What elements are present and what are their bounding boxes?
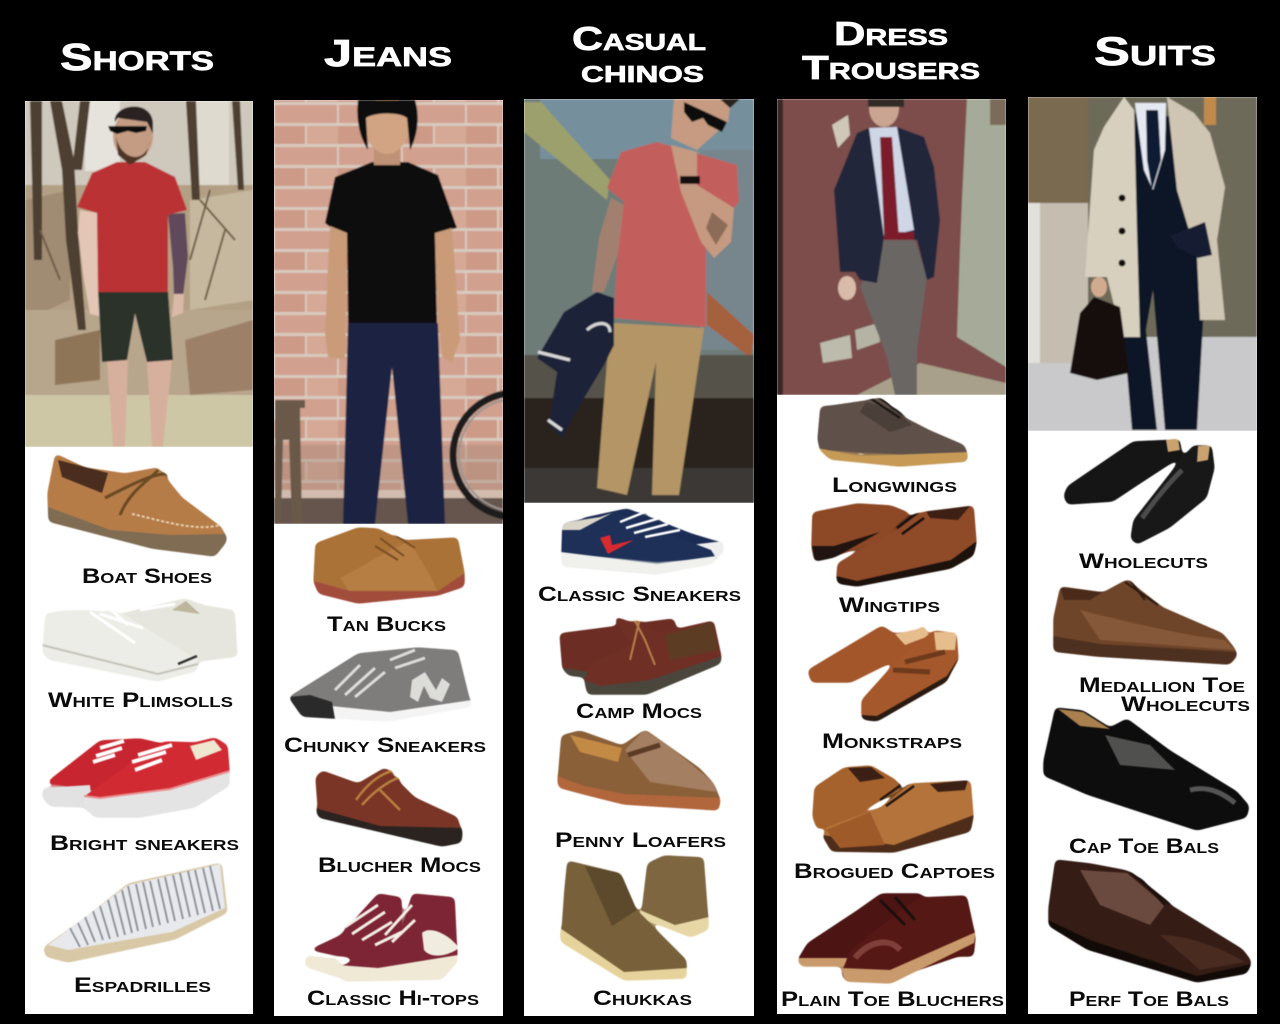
label: Brogued Captoes: Brogued Captoes [794,860,995,883]
label: Cap Toe Bals: Cap Toe Bals [1069,835,1219,858]
label: Medallion Toe Wholecuts: Medallion Toe [1079,674,1245,697]
heading: Dress Trousers: Dress [834,15,948,52]
label: Camp Mocs: Camp Mocs [576,700,702,723]
shoe: brogued captoes [812,765,974,853]
shoe: penny loafers [557,729,721,811]
label: Wholecuts: Wholecuts [1079,550,1208,573]
photo: man in navy blazer and grey trousers [777,89,1006,395]
photo: man in coral tee and chinos [524,99,754,503]
label: Blucher Mocs: Blucher Mocs [318,854,481,877]
photo: man in trench coat and navy suit [1028,97,1257,431]
label: Classic Sneakers: Classic Sneakers [538,583,741,606]
heading: Casual chinos [572,20,706,89]
shoe: tan bucks [313,527,465,604]
shoe: classic sneakers [561,508,724,575]
heading: Shorts: Shorts [60,37,214,79]
heading: Casual chinos: Casual [572,20,706,57]
label: White Plimsolls: White Plimsolls [48,689,233,712]
label: Classic Hi-tops: Classic Hi-tops [307,987,479,1010]
shoe: espadrilles [43,862,228,963]
shoe: wingtips [811,503,977,587]
panel: jeans column [274,100,503,1016]
shoe: monkstraps [807,622,959,722]
label: Chukkas: Chukkas [593,987,692,1010]
panel: casual chinos column [524,99,754,1016]
shoe: bright sneakers [42,737,230,818]
photo: man in black tee and jeans [274,100,503,524]
panel: suits column [1028,97,1257,1014]
label: Boat Shoes: Boat Shoes [82,565,212,588]
shoe: cap toe bals [1043,707,1250,831]
label: Monkstraps: Monkstraps [822,730,962,753]
panel: dress trousers column [777,89,1006,1014]
heading: Casual chinos: chinos [581,52,704,89]
shoe: chunky sneakers [288,647,472,722]
photo: man in red tee and shorts [25,101,253,447]
label: Plain Toe Bluchers: Plain Toe Bluchers [781,988,1004,1011]
shoe: medallion toe wholecuts [1053,579,1238,665]
heading: Dress Trousers [802,15,980,86]
label: Perf Toe Bals: Perf Toe Bals [1069,988,1229,1011]
label: Chunky Sneakers: Chunky Sneakers [284,734,486,757]
label: Medallion Toe Wholecuts: Wholecuts [1121,693,1250,716]
heading: Dress Trousers: Trousers [802,49,980,86]
shoe: camp mocs [559,615,722,695]
shoe: blucher mocs [315,767,463,847]
label: Penny Loafers: Penny Loafers [555,829,726,852]
label: Bright sneakers: Bright sneakers [50,832,239,855]
shoe: plain toe bluchers [797,893,976,984]
label: Longwings: Longwings [832,474,957,497]
label: Tan Bucks: Tan Bucks [327,613,446,636]
label: Wingtips: Wingtips [839,594,940,617]
shoe: perf toe bals [1048,859,1252,983]
shoe: chukkas [560,855,709,981]
label: Espadrilles: Espadrilles [74,974,211,997]
label: Medallion Toe Wholecuts [1079,674,1250,716]
heading: Suits: Suits [1094,30,1216,74]
shoe: longwings [817,397,968,467]
heading: Jeans: Jeans [324,33,452,75]
shoe: white plimsolls [42,598,238,682]
panel: shorts column [25,101,253,1014]
shoe: boat shoes [47,453,227,557]
shoe: wholecuts [1063,438,1215,545]
shoe: classic hi-tops [305,893,459,982]
